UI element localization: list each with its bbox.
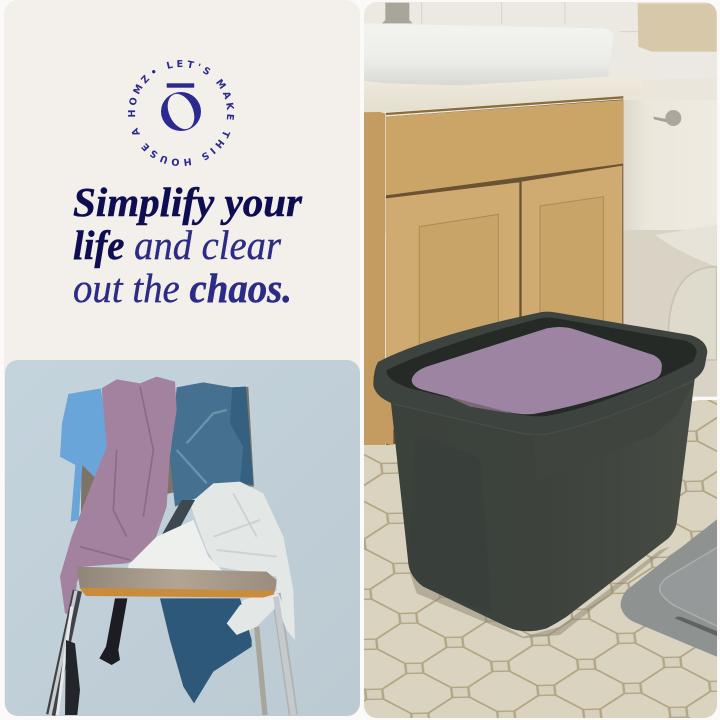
lid handle slot <box>675 617 718 637</box>
seat orange edge <box>79 588 275 598</box>
door right <box>522 166 622 333</box>
denim jeans on the back <box>170 382 253 507</box>
toilet lid <box>623 78 717 103</box>
wall tiles <box>360 0 720 233</box>
wall <box>5 360 360 716</box>
bin rim highlight <box>393 380 693 435</box>
jeans below seat <box>160 598 252 703</box>
bin shadow <box>410 547 670 638</box>
dark strap over clothes <box>162 500 195 535</box>
hand towel <box>638 3 717 52</box>
bin lid <box>621 518 718 657</box>
folded towel <box>412 327 662 414</box>
white sweater <box>190 482 295 640</box>
toilet tank <box>624 100 644 230</box>
black belt <box>99 598 127 665</box>
bin body <box>391 377 695 631</box>
white towel on seat <box>128 520 223 575</box>
tiled floor <box>364 400 720 720</box>
bin rim <box>373 312 708 403</box>
heading <box>73 179 303 311</box>
flush handle <box>653 110 681 126</box>
bathroom background <box>360 0 720 467</box>
bin handle recess <box>408 562 425 588</box>
photo: clothes piled on a chair <box>5 360 360 716</box>
logo mark: O with macron <box>161 83 201 133</box>
seat top <box>77 567 277 592</box>
panel: headline card <box>4 0 360 716</box>
hanging white sleeve <box>227 593 295 640</box>
faucet <box>382 3 413 23</box>
blue shirt <box>60 388 180 522</box>
cabinet backing <box>386 99 623 467</box>
photo: bathroom with storage bin <box>360 0 720 720</box>
dark fabric by the leg <box>65 640 80 715</box>
heading: life and clear <box>73 222 282 268</box>
bin upper band <box>533 383 693 482</box>
cabinet side <box>364 112 386 445</box>
heading: out the chaos. <box>73 265 292 311</box>
door left <box>386 182 519 433</box>
countertop <box>364 84 624 112</box>
logo text: • LET'S MAKE THIS HOUSE A HOMZ <box>128 60 234 166</box>
bin interior <box>387 318 697 416</box>
storage bin <box>373 312 707 638</box>
chrome legs <box>50 591 293 715</box>
logo: circular badge <box>128 60 234 166</box>
lid inner panel <box>660 547 718 627</box>
cabinet foot <box>385 400 394 445</box>
heading: Simplify your <box>73 179 303 225</box>
toilet bowl area <box>622 225 720 397</box>
chair back <box>81 387 254 513</box>
drawer <box>386 100 623 195</box>
sink <box>360 23 613 85</box>
purple shirt <box>60 377 177 617</box>
